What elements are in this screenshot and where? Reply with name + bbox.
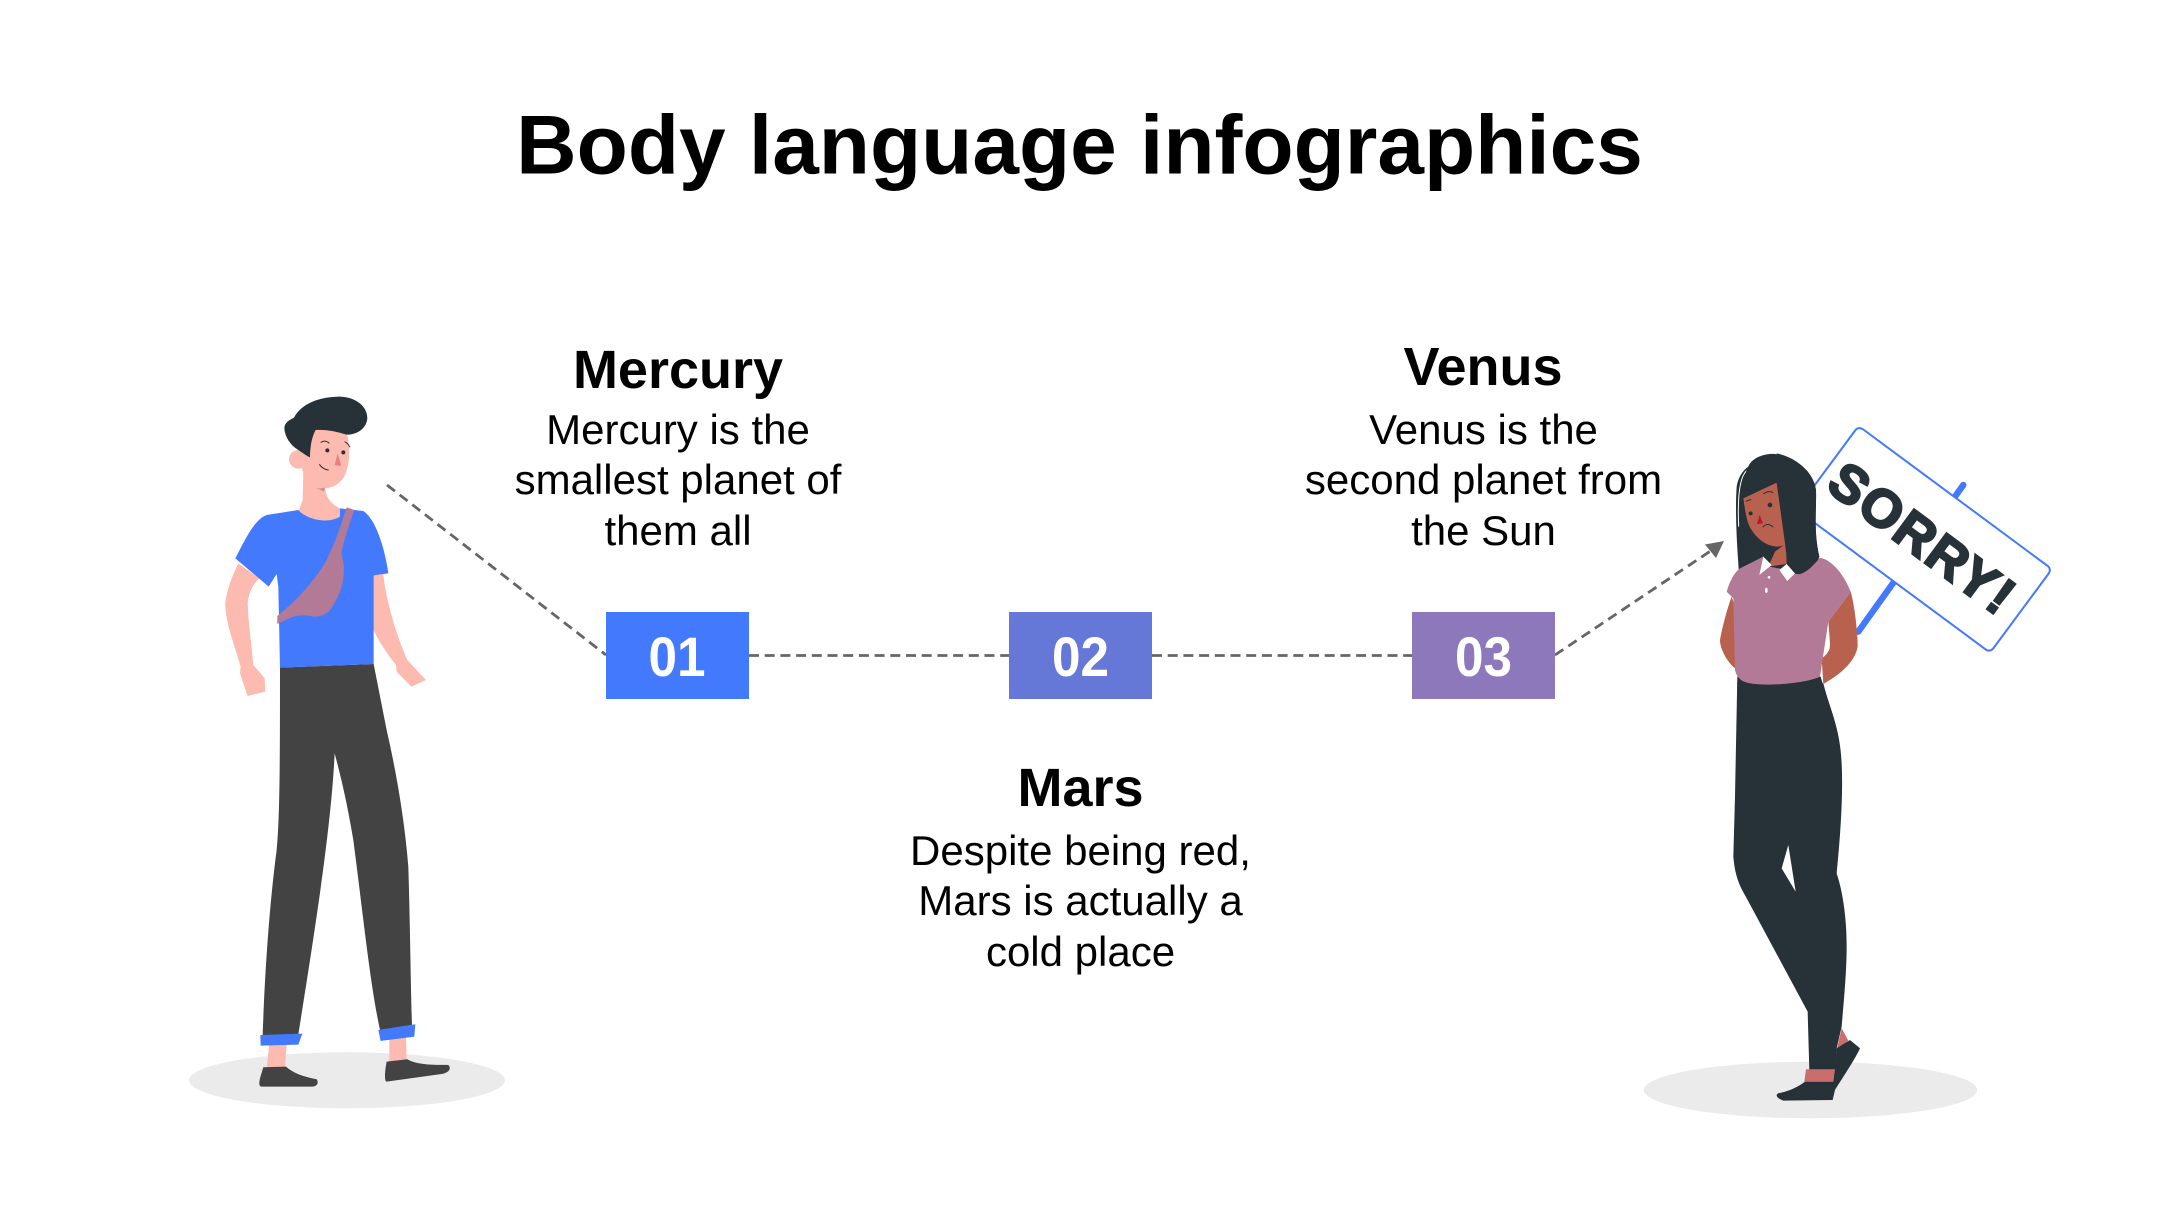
text block: Mercury (515, 340, 842, 554)
arrow: box 03 to woman (1555, 541, 1724, 655)
number box 02: 02 (1052, 625, 1109, 688)
man ground shadow (189, 1052, 505, 1108)
man upper body and head (225, 397, 426, 696)
illustration: woman with sorry sign (1644, 426, 2052, 1118)
number box 01: 01 (648, 625, 706, 688)
text block: Mars: Despite being red, (910, 827, 1251, 874)
number box 03 (1412, 612, 1555, 699)
text block: Mercury: Mercury is the (546, 406, 810, 453)
number box 01 (606, 612, 749, 699)
number box 02 (1009, 612, 1152, 699)
text block: Venus: the Sun (1411, 507, 1556, 554)
text block: Venus: Venus (1403, 337, 1563, 397)
woman legs and shoe (1733, 677, 1860, 1101)
text block: Mercury: smallest planet of (515, 456, 842, 503)
text block: Venus: Venus is the (1369, 406, 1598, 453)
woman upper body and head (1720, 453, 1858, 710)
connector: box 01 to box 02 (749, 654, 1009, 657)
text block: Mars: Mars (1017, 758, 1144, 818)
sign (1797, 426, 2052, 653)
text block: Mars: cold place (986, 928, 1175, 975)
connector: man to box 01 (387, 485, 606, 655)
text block: Mercury: them all (604, 507, 752, 554)
number box 03: 03 (1455, 625, 1512, 688)
title: Body language infographics (516, 98, 1643, 192)
illustration: man with bag (189, 397, 505, 1108)
man legs and shoes (259, 664, 450, 1087)
text block: Venus: second planet from (1305, 456, 1662, 503)
woman ground shadow (1644, 1062, 1977, 1118)
text block: Mars: Mars is actually a (918, 877, 1243, 924)
text block: Mercury: Mercury (573, 340, 783, 400)
text block: Mars (910, 758, 1251, 975)
connector: box 02 to box 03 (1152, 654, 1412, 657)
sign: SORRY! (1817, 451, 2027, 627)
text block: Venus (1305, 337, 1662, 554)
